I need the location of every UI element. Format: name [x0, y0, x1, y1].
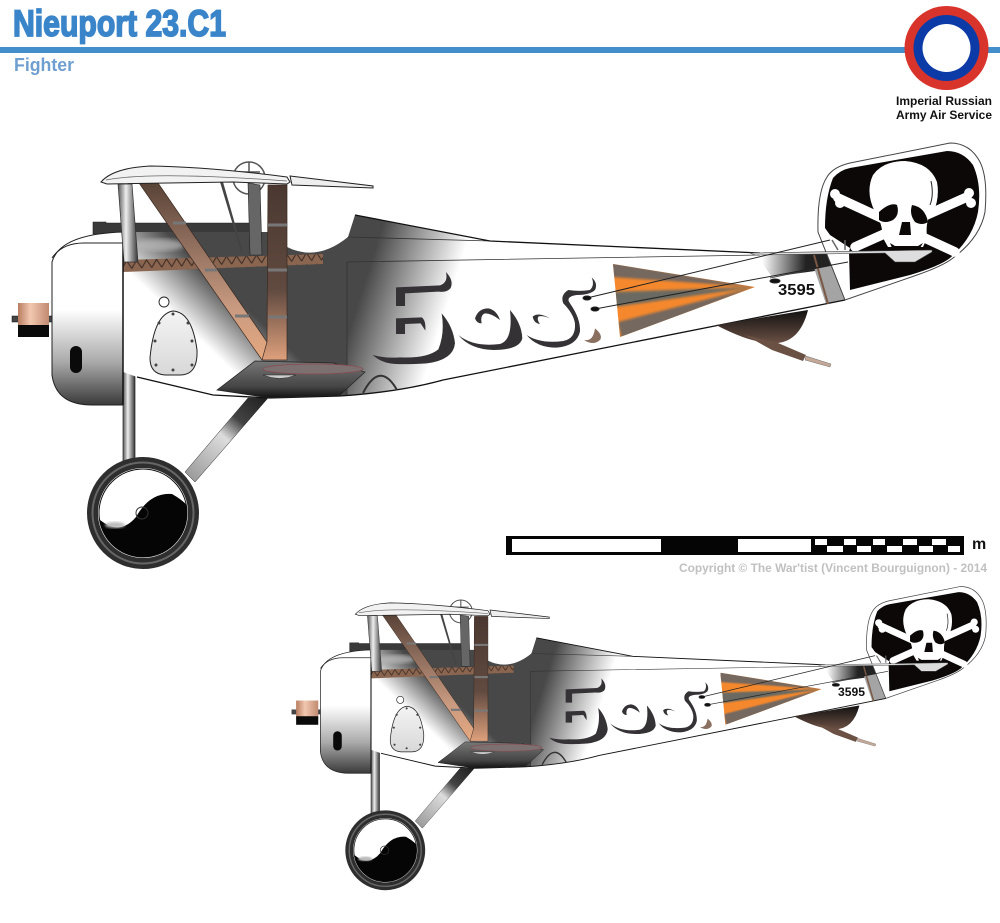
- crossbones: [838, 197, 967, 252]
- propeller boss: [12, 303, 52, 337]
- machine gun: [93, 222, 250, 234]
- skull: [869, 161, 938, 247]
- air service label line 2: Army Air Service: [896, 108, 992, 122]
- upper wing centre strut: [220, 182, 262, 255]
- ring sight: [233, 162, 265, 194]
- landing gear struts: [123, 372, 268, 482]
- V strut: [139, 183, 287, 360]
- outline: [137, 215, 845, 398]
- copyright: Copyright © The War'tist (Vincent Bourguignon) - 2014: [679, 561, 987, 575]
- scale bar: [506, 536, 964, 555]
- cowling vent: [70, 346, 82, 373]
- front cabane strut: [118, 184, 138, 262]
- air service label: Imperial Russian: [896, 94, 992, 108]
- upper wing: [101, 166, 373, 188]
- small aircraft side view: [292, 586, 986, 886]
- control cables: [583, 240, 848, 311]
- St George ribbon triangle: [605, 260, 760, 340]
- fuselage script marking: [373, 272, 601, 364]
- decorative zigzag band: [123, 254, 323, 272]
- panel lines: [347, 237, 848, 395]
- roundel: Imperial Russian: [904, 6, 988, 90]
- scale unit: m: [972, 536, 986, 553]
- tail rudder with skull: [818, 143, 986, 300]
- large aircraft side view: [12, 143, 986, 564]
- serial number small: 3595: [838, 685, 865, 699]
- header rule: [0, 47, 1000, 53]
- subtitle: Fighter: [14, 55, 74, 75]
- fuselage: [120, 210, 857, 400]
- title: Nieuport 23.C1: [13, 3, 226, 44]
- cowling: [52, 232, 123, 405]
- lower wing: [217, 361, 397, 398]
- serial number large: 3595: [778, 282, 815, 299]
- wheel: [92, 462, 194, 564]
- access panel: [150, 297, 197, 375]
- tailplane: [750, 240, 932, 262]
- tail skid fairing: [716, 310, 831, 367]
